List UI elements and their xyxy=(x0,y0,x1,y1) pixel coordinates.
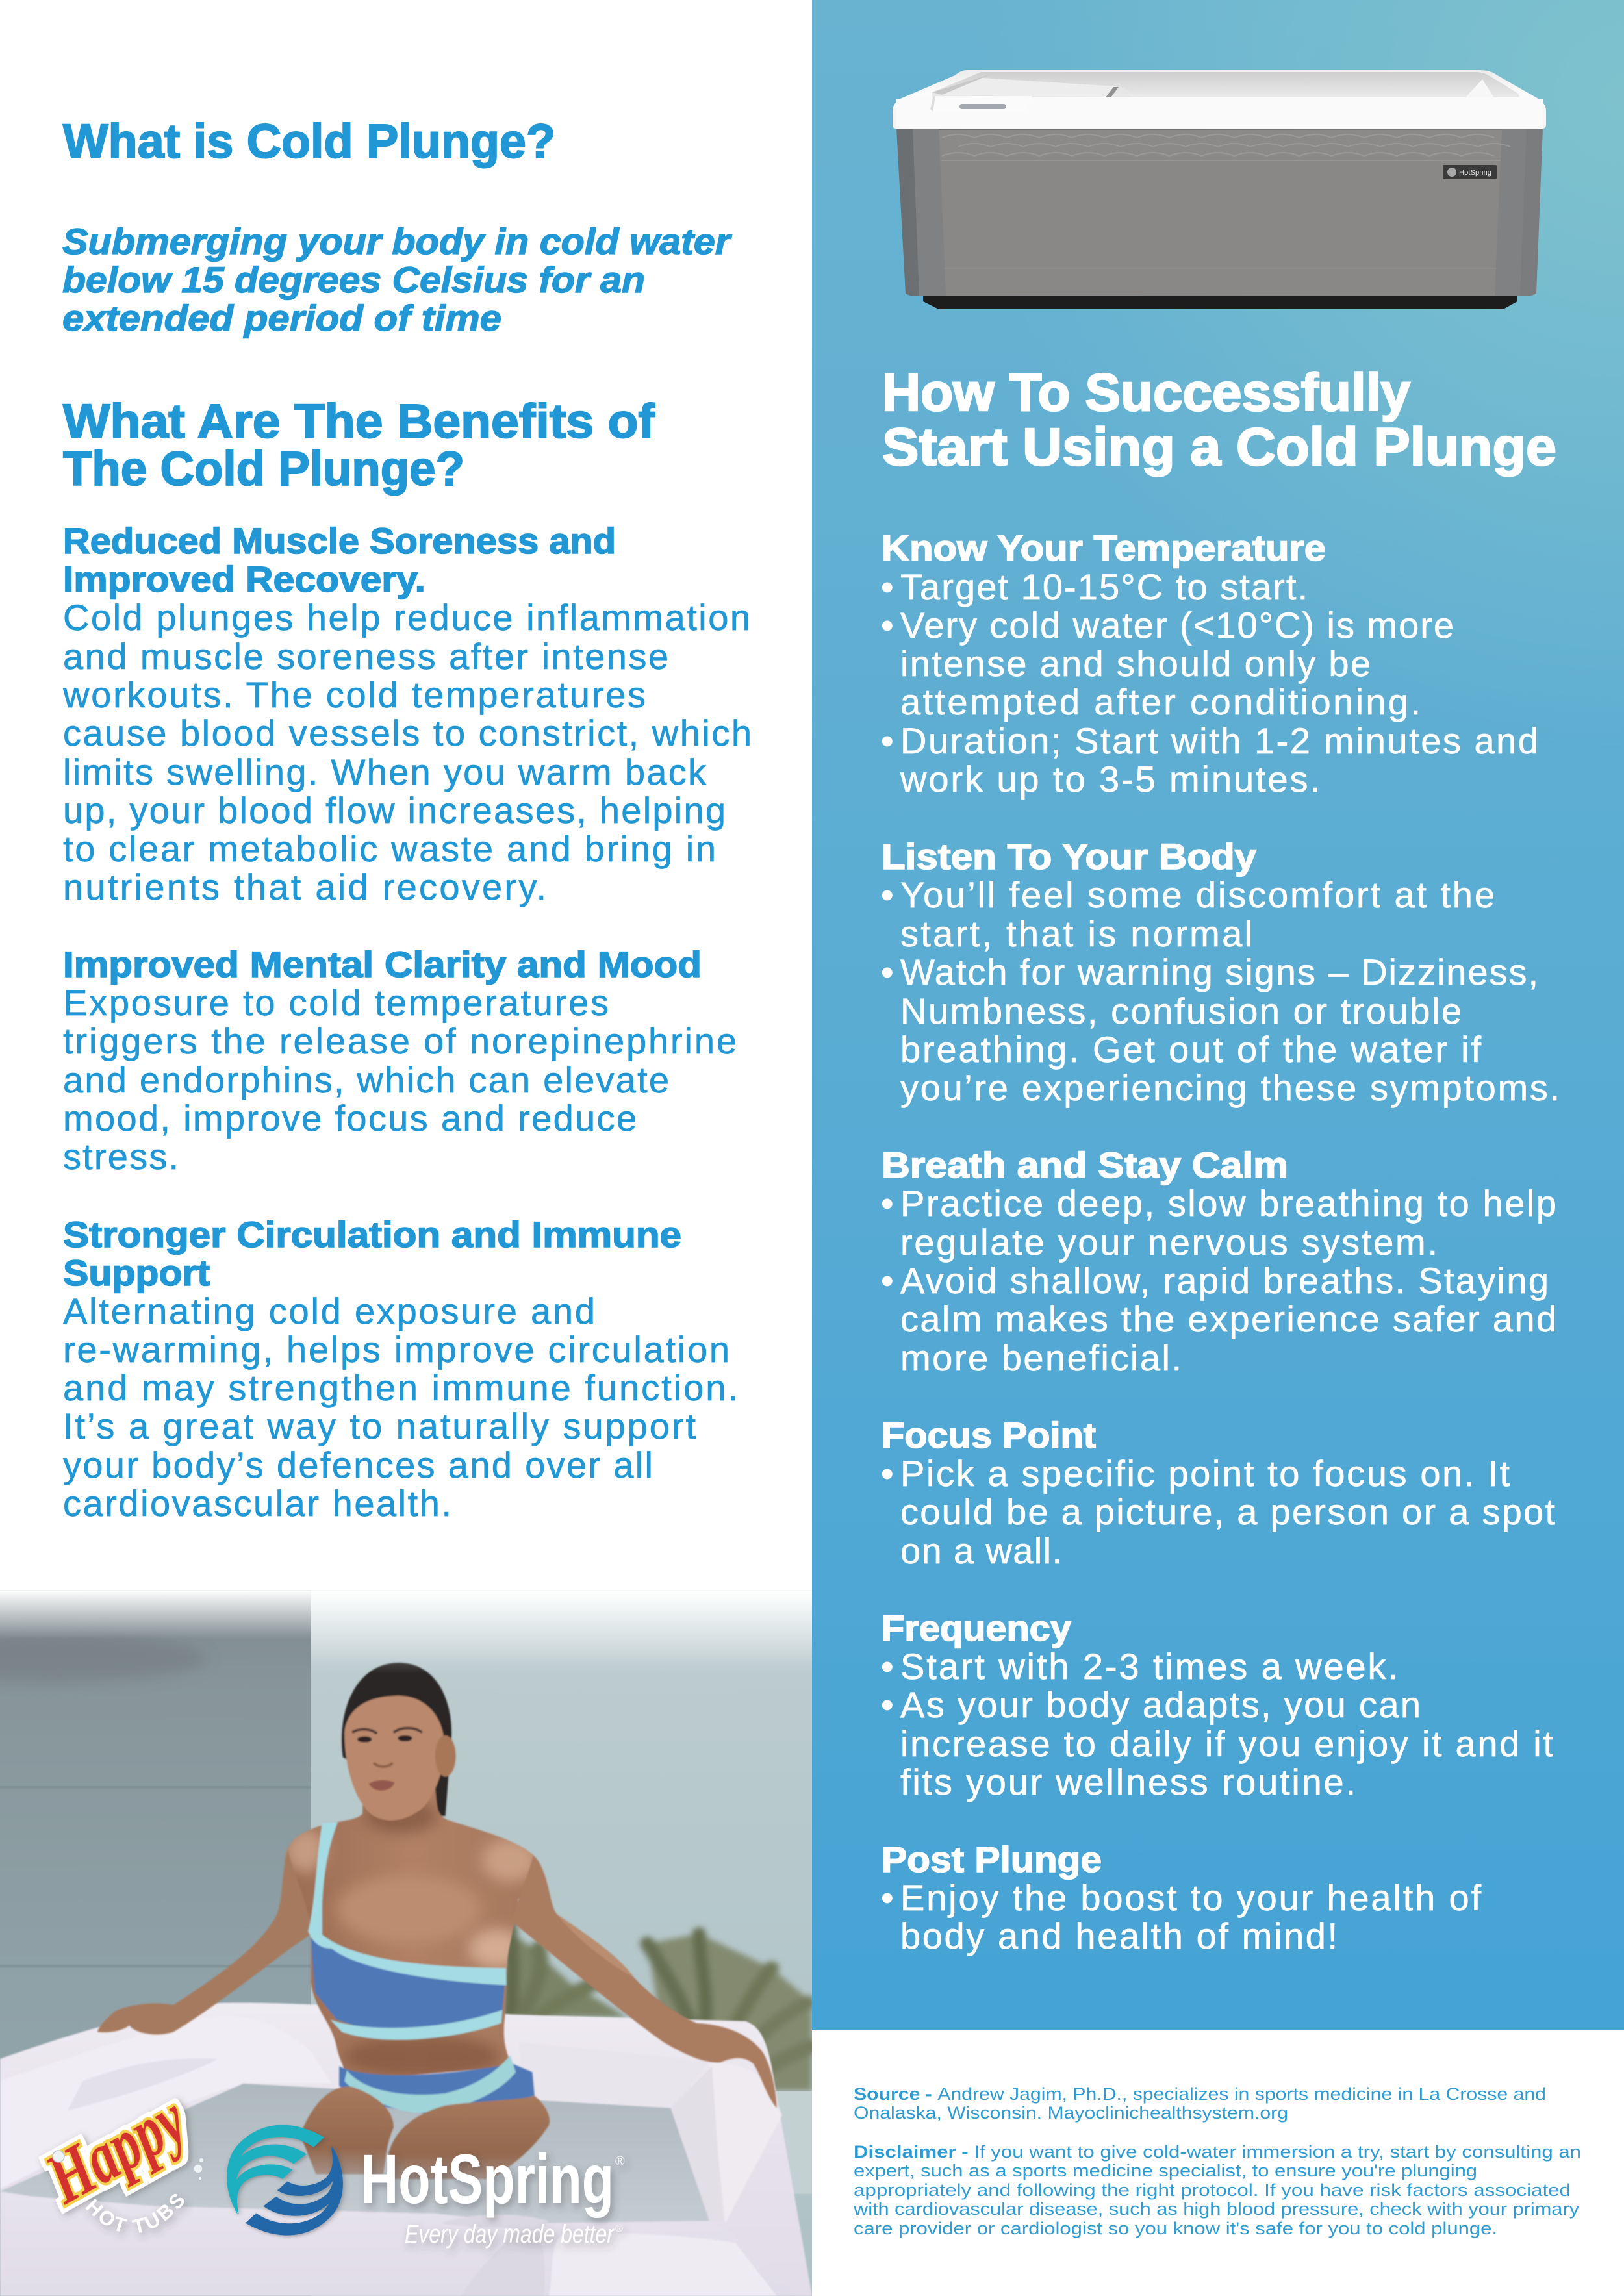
tip: breath and stay calm: Breath and Stay Calm xyxy=(882,1144,1288,1185)
logo: HotSpring wordmark: ® xyxy=(615,2154,625,2169)
heading: what is cold plunge: What is Cold Plunge? xyxy=(63,114,555,168)
panel: how to use cold plunge xyxy=(812,0,1624,2030)
tip: breath and stay calm: Practice deep, slow breathing to help xyxy=(900,1183,1556,1224)
benefit: circulation and immune support: Stronger Circulation and Immune xyxy=(63,1214,681,1255)
neck and torso xyxy=(285,1787,539,2081)
plants xyxy=(505,1919,812,2091)
tip: know your temperature: work up to 3-5 minutes. xyxy=(900,759,1320,800)
logo: HotSpring wordmark: Every day made better xyxy=(405,2220,615,2249)
benefit: mental clarity: Exposure to cold temperatures xyxy=(63,982,609,1023)
tip: post plunge: Post Plunge xyxy=(882,1839,1102,1880)
tip: breath and stay calm: • xyxy=(881,1260,894,1301)
benefit: mental clarity: and endorphins, which can elevate xyxy=(63,1059,669,1100)
disclaimer text: Disclaimer - If you want to give cold-water immersion a try, start by consulting an xyxy=(854,2142,1581,2162)
arm right xyxy=(512,1855,777,2108)
tip: frequency: As your body adapts, you can xyxy=(900,1684,1421,1725)
planter xyxy=(774,2091,812,2194)
source text xyxy=(854,2084,1546,2123)
tub rim xyxy=(893,70,1546,129)
source text: Onalaska, Wisconsin. Mayoclinichealthsystem.org xyxy=(854,2103,1288,2123)
benefit: muscle soreness: and muscle soreness after intense xyxy=(63,636,668,677)
arm left xyxy=(97,1850,312,2034)
benefit: muscle soreness: nutrients that aid recovery. xyxy=(63,866,546,907)
panel: what is cold plunge and benefits xyxy=(62,114,752,1524)
tip: focus point: Pick a specific point to focus on. It xyxy=(900,1453,1510,1494)
benefit: mental clarity xyxy=(63,944,737,1177)
tip: post plunge: • xyxy=(881,1877,894,1918)
benefit: circulation and immune support: It’s a great way to naturally support xyxy=(63,1406,696,1446)
tip: breath and stay calm: regulate your nervous system. xyxy=(900,1222,1438,1263)
tip: focus point xyxy=(881,1415,1555,1571)
disclaimer text: care provider or cardiologist so you know it's safe for you to cold plunge. xyxy=(854,2219,1497,2238)
tip: focus point: on a wall. xyxy=(900,1530,1062,1571)
tip: listen to your body: • xyxy=(881,952,894,992)
benefit: mental clarity: Improved Mental Clarity and Mood xyxy=(63,944,702,985)
tip: frequency: • xyxy=(881,1684,894,1725)
woman xyxy=(97,1663,777,2179)
tip: listen to your body: you’re experiencing these symptoms. xyxy=(900,1067,1560,1108)
benefit: muscle soreness: up, your blood flow increases, helping xyxy=(63,790,726,831)
hair xyxy=(342,1663,451,1816)
tip: know your temperature: attempted after conditioning. xyxy=(900,681,1421,722)
bubbles xyxy=(53,2151,204,2180)
definition text xyxy=(62,221,732,338)
tip: frequency: • xyxy=(881,1646,894,1687)
benefit: mental clarity: mood, improve focus and reduce xyxy=(63,1098,637,1139)
heading: how to start: How To Successfully xyxy=(882,363,1410,422)
tip: breath and stay calm: calm makes the experience safer and xyxy=(900,1298,1556,1339)
benefit: muscle soreness: Improved Recovery. xyxy=(63,559,425,599)
eyes and brows xyxy=(352,1728,422,1791)
benefit: muscle soreness xyxy=(62,520,752,907)
disclaimer text xyxy=(853,2142,1581,2238)
tip: know your temperature xyxy=(881,527,1538,800)
tip: focus point: Focus Point xyxy=(882,1415,1096,1456)
swim bottoms xyxy=(339,2063,535,2118)
tip: listen to your body: Listen To Your Body xyxy=(882,836,1256,877)
panel: source and disclaimer xyxy=(853,2084,1581,2238)
benefit: mental clarity: stress. xyxy=(63,1136,179,1177)
tub basin xyxy=(932,72,1519,97)
water xyxy=(0,2084,709,2223)
tip: breath and stay calm: more beneficial. xyxy=(900,1337,1182,1378)
tip: post plunge: Enjoy the boost to your health of xyxy=(900,1877,1481,1918)
logo: HotSpring wordmark: ® xyxy=(615,2223,623,2234)
legs xyxy=(300,2086,394,2175)
tip: know your temperature: Know Your Temperature xyxy=(882,527,1326,568)
definition text: below 15 degrees Celsius for an xyxy=(62,259,645,300)
tip: frequency: increase to daily if you enjoy it and it xyxy=(900,1723,1553,1764)
benefit: circulation and immune support: Alternating cold exposure and xyxy=(63,1291,595,1331)
benefit: circulation and immune support xyxy=(63,1214,738,1524)
heading: how to start xyxy=(882,363,1556,477)
torso shading xyxy=(285,1798,539,2078)
tip: listen to your body: • xyxy=(881,874,894,915)
tub badge xyxy=(1443,165,1497,179)
logo: HotSpring wordmark: HotSpring xyxy=(361,2139,614,2218)
tub seat cover xyxy=(942,78,1117,97)
benefit: muscle soreness: Cold plunges help reduce inflammation xyxy=(63,597,750,638)
tip: listen to your body xyxy=(881,836,1560,1108)
benefit: muscle soreness: Reduced Muscle Soreness and xyxy=(63,520,616,561)
tip: listen to your body: You’ll feel some discomfort at the xyxy=(900,874,1495,915)
disclaimer text: expert, such as a sports medicine specialist, to ensure you're plunging xyxy=(854,2161,1477,2180)
product image: plunge tub xyxy=(893,70,1546,309)
tip: breath and stay calm: Avoid shallow, rapid breaths. Staying xyxy=(900,1260,1549,1301)
fade to white at top of photo xyxy=(0,1521,812,1674)
tub badge: HotSpring xyxy=(1459,169,1491,177)
tip: listen to your body: breathing. Get out of the water if xyxy=(900,1029,1481,1070)
logo: Happy Hot Tubs xyxy=(33,2078,204,2237)
heading: how to start: Start Using a Cold Plunge xyxy=(882,418,1556,477)
tip: listen to your body: Watch for warning signs – Dizziness, xyxy=(900,952,1538,992)
tub cabinet xyxy=(896,129,1543,296)
tip: focus point: could be a picture, a person or a spot xyxy=(900,1491,1555,1532)
tip: focus point: • xyxy=(881,1453,894,1494)
tip: listen to your body: start, that is normal xyxy=(900,913,1252,954)
benefit: muscle soreness: workouts. The cold temperatures xyxy=(62,674,646,715)
benefit: circulation and immune support: your body’s defences and over all xyxy=(63,1444,653,1485)
tip: frequency: fits your wellness routine. xyxy=(900,1761,1356,1802)
tub body xyxy=(0,2002,812,2296)
definition text: extended period of time xyxy=(62,297,501,338)
tub control panel xyxy=(930,96,1032,112)
tip: frequency xyxy=(881,1608,1553,1802)
heading: benefits xyxy=(63,394,655,496)
face xyxy=(344,1696,445,1821)
benefit: circulation and immune support: re-warming, helps improve circulation xyxy=(63,1329,730,1370)
tip: post plunge: body and health of mind! xyxy=(900,1915,1338,1956)
tip: know your temperature: intense and should only be xyxy=(900,643,1371,684)
tip: listen to your body: Numbness, confusion or trouble xyxy=(900,990,1462,1031)
tip: know your temperature: Duration; Start with 1-2 minutes and xyxy=(900,720,1538,761)
logo: HotSpring swirl icon xyxy=(227,2125,343,2236)
wall background xyxy=(0,1526,812,2296)
Hot Tubs arc text xyxy=(81,2197,190,2234)
tip: breath and stay calm: • xyxy=(881,1183,894,1224)
tip: frequency: Start with 2-3 times a week. xyxy=(900,1646,1398,1687)
tub corner highlight xyxy=(1465,79,1494,97)
panel background xyxy=(812,0,1624,2030)
tip: post plunge xyxy=(881,1839,1481,1956)
benefit: muscle soreness: limits swelling. When you warm back xyxy=(63,751,707,792)
bikini top xyxy=(311,1939,505,2037)
Happy wordmark: Happy xyxy=(33,2078,199,2219)
heading: benefits: The Cold Plunge? xyxy=(63,442,464,496)
benefit: muscle soreness: to clear metabolic waste and bring in xyxy=(63,828,716,869)
tip: know your temperature: Target 10-15°C to start. xyxy=(900,566,1308,607)
disclaimer text: with cardiovascular disease, such as high blood pressure, check with your primary xyxy=(853,2199,1580,2219)
benefit: mental clarity: triggers the release of norepinephrine xyxy=(63,1020,737,1061)
benefit: circulation and immune support: and may strengthen immune function. xyxy=(63,1367,738,1408)
tip: know your temperature: • xyxy=(881,605,894,646)
tip: know your temperature: Very cold water (<10°C) is more xyxy=(900,605,1454,646)
source text: Source - Andrew Jagim, Ph.D., specializes in sports medicine in La Crosse and xyxy=(854,2084,1546,2104)
logo: HotSpring wordmark xyxy=(361,2139,625,2249)
photo: woman sitting in cold plunge tub xyxy=(0,1521,812,2296)
benefit: circulation and immune support: Support xyxy=(63,1252,210,1293)
tip: breath and stay calm xyxy=(881,1144,1556,1378)
benefit: muscle soreness: cause blood vessels to constrict, which xyxy=(63,713,752,753)
tub base xyxy=(923,296,1517,309)
tip: know your temperature: • xyxy=(881,566,894,607)
disclaimer text: appropriately and following the right protocol. If you have risk factors associated xyxy=(854,2180,1571,2200)
tip: know your temperature: • xyxy=(881,720,894,761)
definition text: Submerging your body in cold water xyxy=(62,221,732,262)
benefit: circulation and immune support: cardiovascular health. xyxy=(63,1483,451,1524)
tip: frequency: Frequency xyxy=(882,1608,1071,1648)
logo: Happy Hot Tubs: HOT TUBS xyxy=(86,2194,189,2237)
heading: benefits: What Are The Benefits of xyxy=(63,394,655,448)
